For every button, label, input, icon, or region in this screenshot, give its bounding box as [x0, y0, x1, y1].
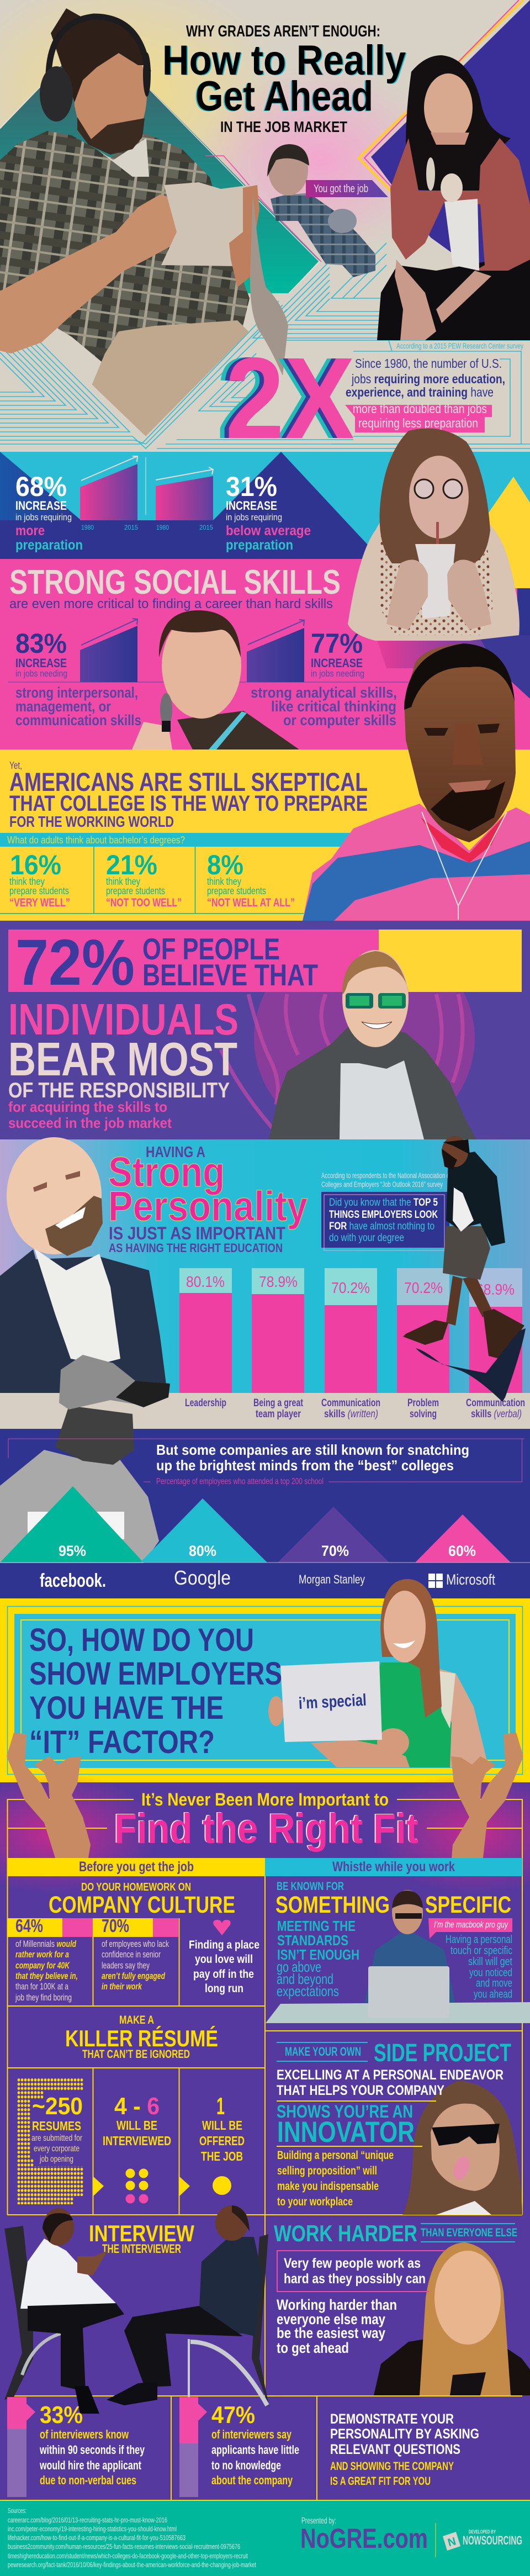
- stat: 77 percent: or computer skills: [283, 712, 396, 729]
- panel: work harder: WORK HARDER: [274, 2220, 417, 2246]
- row: bar labels: Problem: [407, 1397, 439, 1409]
- stat: 64 percent: [7, 1915, 93, 2003]
- text: finding a place: [189, 1939, 259, 1995]
- title: [162, 23, 406, 135]
- panel: be known for something specific: touch or specific: [451, 1945, 512, 1957]
- stat: 31 percent: in jobs requiring: [226, 512, 282, 522]
- stat: 250 resumes: job opening: [39, 2155, 73, 2164]
- stat: 1 offered the job: 1: [216, 2093, 225, 2120]
- row: bar labels: Leadership: [185, 1397, 226, 1409]
- stat: 47 percent: of interviewers say: [211, 2427, 292, 2441]
- bar chart: 83 percent: [80, 619, 137, 682]
- bar chart: employer attributes: 68.9%: [476, 1281, 515, 1298]
- stat: 33 percent: would hire the applicant: [39, 2458, 141, 2472]
- logo: nogre.com: NoGRE.com: [300, 2523, 428, 2554]
- text block: americans are still skeptical: THAT COLLEGE IS THE WAY TO PREPARE: [9, 791, 368, 816]
- heading: strong personality: AS HAVING THE RIGHT EDUCATION: [109, 1241, 283, 1255]
- stat: 4 to 6 interviewed: WILL BE: [116, 2118, 157, 2132]
- logo: nogre.com: [300, 2516, 428, 2554]
- sources: Sources:: [8, 2506, 26, 2515]
- section: hero paper background: [0, 0, 530, 452]
- stat: not too well: [106, 849, 182, 909]
- text block: 1980 jobs stat: Since 1980, the number of U.S.: [355, 356, 502, 371]
- logo: nowsourcing: N: [447, 2535, 457, 2549]
- stat: 77 percent: INCREASE: [311, 656, 363, 670]
- panel: side project: selling proposition” will: [277, 2165, 377, 2177]
- stat: 83 percent: 83%: [15, 628, 67, 659]
- stat: 68 percent: more: [15, 523, 45, 539]
- text block: 1980 jobs stat: experience, and training have: [346, 385, 494, 399]
- heading: SHOW EMPLOYERS: [29, 1656, 282, 1692]
- heading: STRONG SOCIAL SKILLS: [9, 563, 341, 601]
- section: strong social skills: [0, 477, 530, 749]
- stat: 77 percent: 77%: [311, 628, 363, 659]
- panel: interview the interviewer: [4, 2205, 269, 2414]
- stat: 77 percent: strong analytical skills,: [251, 684, 397, 701]
- text block: demonstrate your personality: RELEVANT QUESTIONS: [330, 2442, 460, 2457]
- photo: two men in interview chairs: [4, 2205, 269, 2414]
- text block: individuals bear most: [8, 995, 239, 1131]
- heading: strong personality: Strong: [108, 1149, 225, 1196]
- stat: 64 percent: that they believe in,: [15, 1971, 78, 1981]
- photo: man with headphones reading a letter: [0, 8, 288, 436]
- stat: 47 percent: [179, 2397, 299, 2497]
- panel: be known for something specific: you ahead: [474, 1988, 512, 2000]
- stat: 77 percent: in jobs needing: [311, 668, 364, 679]
- panel: work harder: to get ahead: [277, 2340, 349, 2356]
- panel: be known for something specific: and beyond: [277, 1971, 333, 1987]
- heading: “IT” FACTOR?: [29, 1724, 215, 1760]
- sources: [8, 2506, 256, 2569]
- heading: are even more critical to finding a career than hard skills: [9, 597, 333, 611]
- panel: be known for something specific: STANDARDS: [277, 1932, 348, 1949]
- text block: individuals bear most: OF THE RESPONSIBILITY: [8, 1079, 230, 1102]
- stat: 70 percent: [93, 1915, 179, 1992]
- panel: be known for something specific: expectations: [277, 1983, 339, 1999]
- stat: 1 offered the job: [199, 2093, 245, 2195]
- heading: find the right fit: [114, 1790, 418, 1852]
- stat: very well: prepare students: [9, 885, 69, 896]
- panel: company culture: [7, 1881, 259, 2003]
- decoration: navy triangle top right: [359, 0, 530, 309]
- photo: man with eyebrow raised in striped shirt: [303, 643, 530, 921]
- stat: very well: 16%: [10, 849, 61, 880]
- source note: Colleges and Employers “Job Outlook 2016” survey: [321, 1180, 443, 1189]
- panel: be known for something specific: go above: [277, 1959, 321, 1975]
- stat: 68 percent: 68%: [15, 471, 67, 502]
- stat: not well at all: “NOT WELL AT ALL”: [207, 896, 295, 909]
- row: bar labels: [0, 1393, 530, 1429]
- bar chart: 31 percent: 1980: [156, 524, 169, 531]
- bar chart: employer attributes: 70.2%: [331, 1279, 370, 1296]
- stat: very well: think they: [9, 876, 45, 887]
- stat: not well at all: think they: [207, 876, 241, 887]
- stat: 70 percent: aren’t fully engaged: [102, 1971, 165, 1981]
- section: strong personality background: [0, 1139, 530, 1393]
- heading: strong personality: HAVING A: [146, 1143, 205, 1160]
- source note: According to respondents to the National Association of: [321, 1171, 451, 1180]
- photo: woman with glasses drinking shake: [348, 429, 520, 641]
- stat: 83 percent: strong interpersonal,: [15, 684, 138, 701]
- sources: business2community.com/human-resources/25-fun-facts-resumes-interviews-social-recruitment-0975676: [8, 2542, 240, 2551]
- text block: demonstrate your personality: PERSONALITY BY ASKING: [330, 2426, 479, 2442]
- chart: triangles by company: 95%: [59, 1543, 86, 1559]
- stat: 250 resumes: are submitted for: [31, 2134, 83, 2143]
- section: it factor panel: [0, 1598, 530, 1782]
- heading: strong personality: Personality: [108, 1183, 308, 1230]
- heading: [29, 1622, 282, 1760]
- photo: seated woman in red blazer: [377, 55, 530, 340]
- decoration: yellow frame lines: [7, 1799, 522, 2500]
- heading: SO, HOW DO YOU: [29, 1622, 254, 1658]
- sign: i'm special: [280, 1661, 382, 1742]
- stat: 70 percent: 70%: [102, 1915, 129, 1936]
- photo: smiling woman holding sign: [268, 1579, 489, 1767]
- panel: work harder: everyone else may: [277, 2311, 385, 2327]
- bar chart: 68 percent: 2015: [124, 524, 138, 531]
- text block: best colleges: [8, 1439, 524, 1486]
- row: bar labels: skills (written): [324, 1408, 378, 1420]
- text block: 1980 jobs stat: more than doubled than jobs: [353, 402, 487, 416]
- text block: americans are still skeptical: AMERICANS ARE STILL SKEPTICAL: [9, 767, 368, 796]
- text block: best colleges: Percentage of employees who attended a top 200 school: [156, 1477, 324, 1486]
- stat: 250 resumes: [31, 2093, 83, 2164]
- photo: walking man with check mark: [403, 1136, 526, 1402]
- chart: triangles by company: 80%: [189, 1543, 216, 1559]
- stat: 47 percent: 47%: [211, 2401, 255, 2429]
- callout: top 5 things: do with your degree: [329, 1232, 404, 1244]
- stat: 47 percent: to no knowledge: [211, 2458, 281, 2472]
- panel: side project: SHOWS YOU’RE AN: [277, 2102, 413, 2121]
- heading: find the right fit: Find the Right Fit: [114, 1806, 418, 1852]
- decoration: cyan line pattern: [0, 243, 530, 448]
- panel: killer resume: THAT CAN’T BE IGNORED: [82, 2048, 190, 2061]
- sources: inc.com/peter-economy/19-interesting-hiring-statistics-you-should-know.html: [8, 2525, 177, 2533]
- row: bar labels: team player: [256, 1408, 301, 1420]
- stat: 77 percent: like critical thinking: [271, 698, 396, 715]
- banner: 72 percent: [8, 926, 522, 999]
- text block: americans are still skeptical: FOR THE WORKING WORLD: [9, 813, 174, 830]
- bar chart: 31 percent: 2015: [199, 524, 213, 531]
- stat: 31 percent: [226, 471, 311, 553]
- stat: 64 percent: company for 40K: [15, 1960, 70, 1971]
- stat: 4 to 6 interviewed: INTERVIEWED: [103, 2134, 171, 2148]
- stats: opinions of degrees: [0, 847, 304, 914]
- panel: killer resume: [17, 2014, 245, 2204]
- text block: demonstrate your personality: DEMONSTRATE YOUR: [330, 2411, 454, 2427]
- panel: side project: THAT HELPS YOUR COMPANY: [277, 2083, 444, 2098]
- chart: triangles by company: [0, 1486, 530, 1563]
- panel: killer resume: KILLER RÉSUMÉ: [65, 2025, 218, 2051]
- callout: macbook pro guy: [428, 1918, 512, 1939]
- sources: lifehacker.com/how-to-find-out-if-a-company-is-a-cultural-fit-for-you-510587663: [8, 2533, 186, 2542]
- title: How to Really: [162, 37, 406, 84]
- stat: 31 percent: below average: [226, 523, 311, 539]
- panel: work harder: [274, 2220, 530, 2395]
- title: WHY GRADES AREN’T ENOUGH:: [186, 23, 380, 40]
- band: whistle while you work: [265, 1858, 522, 1876]
- stat: 64 percent: 64%: [15, 1915, 43, 1936]
- stat: 83 percent: communication skills: [15, 712, 141, 729]
- chart: dot grid of resumes: [17, 2078, 83, 2204]
- logo: nogre.com: Presented by:: [301, 2516, 336, 2526]
- logo: nowsourcing: [443, 2529, 522, 2551]
- stat: 70 percent: in their work: [102, 1981, 142, 1992]
- stat: 1 offered the job: WILL BE: [202, 2118, 242, 2132]
- stat: not well at all: prepare students: [207, 885, 266, 896]
- stat: 70 percent: of employees who lack: [102, 1939, 169, 1949]
- text block: demonstrate your personality: AND SHOWING THE COMPANY: [330, 2460, 454, 2473]
- banner: 72 percent: BELIEVE THAT: [142, 958, 318, 992]
- decoration: teal diamond: [0, 32, 321, 293]
- stat: 33 percent: [7, 2397, 145, 2497]
- stat: 31 percent: INCREASE: [226, 499, 277, 513]
- logos: employers: Morgan Stanley: [299, 1572, 365, 1586]
- text block: demonstrate your personality: IS A GREAT FIT FOR YOU: [330, 2475, 431, 2488]
- stat: very well: “VERY WELL”: [9, 896, 70, 909]
- section: best colleges background: [0, 1429, 530, 1598]
- big 2X: 2X: [225, 333, 355, 464]
- photo: laughing bald man in suit: [0, 1137, 167, 1393]
- bar chart: 31 percent: [156, 467, 213, 531]
- stat: 31 percent: preparation: [226, 537, 293, 553]
- panel: be known for something specific: you noticed: [469, 1967, 512, 1979]
- text: finding a place: long run: [205, 1982, 243, 1995]
- stat: 31 percent: 31%: [226, 471, 277, 502]
- sign: i'm special: i’m special: [298, 1691, 367, 1713]
- section: personal responsibility: [0, 921, 530, 1143]
- stat: 250 resumes: every corporate: [34, 2144, 80, 2153]
- text block: individuals bear most: for acquiring the skills to: [8, 1099, 167, 1115]
- text block: best colleges: But some companies are still known for snatching: [156, 1442, 469, 1458]
- photo: man in sunglasses: [269, 950, 476, 1139]
- stat: 83 percent: in jobs needing: [15, 668, 67, 679]
- panel: be known for something specific: and move: [476, 1977, 512, 1989]
- bar chart: employer attributes: 80.1%: [186, 1273, 225, 1290]
- panel: side project: MAKE YOUR OWN: [285, 2045, 361, 2058]
- heading: [9, 563, 341, 611]
- stat: very well: [9, 849, 70, 909]
- bar chart: 77 percent: [247, 620, 304, 682]
- band: whistle while you work: Whistle while you work: [332, 1859, 455, 1875]
- stat: 47 percent: about the company: [211, 2473, 293, 2487]
- source note: [321, 1171, 451, 1189]
- stat: 33 percent: due to non-verbal cues: [40, 2473, 136, 2487]
- stat: 4 to 6 interviewed: 4 - 6: [114, 2093, 160, 2120]
- logos: employers: Google: [174, 1566, 231, 1589]
- stat: 68 percent: in jobs requiring: [15, 512, 72, 522]
- stat: not well at all: 8%: [207, 849, 243, 880]
- text: finding a place: pay off in the: [193, 1968, 254, 1981]
- logo: nowsourcing: DEVELOPED BY: [469, 2529, 496, 2535]
- bar chart: employer attributes: 78.9%: [259, 1273, 298, 1290]
- text block: 1980 jobs stat: jobs requiring more education,: [351, 372, 505, 386]
- stat: 77 percent: [251, 628, 397, 729]
- stat: 250 resumes: ~250: [32, 2093, 83, 2120]
- text block: 1980 jobs stat: [338, 356, 505, 432]
- row: bar labels: Being a great: [253, 1397, 303, 1409]
- panel: work harder: Working harder than: [277, 2297, 397, 2313]
- callout: top 5 things: THINGS EMPLOYERS LOOK: [329, 1209, 438, 1221]
- row: bar labels: skills (verbal): [471, 1408, 522, 1420]
- text block: individuals bear most: INDIVIDUALS: [8, 995, 239, 1044]
- panel: be known for something specific: ISN’T ENOUGH: [277, 1946, 359, 1963]
- logos: employers: [40, 1566, 495, 1591]
- stat: not well at all: [207, 849, 295, 909]
- panel: be known for something specific: SOMETHING: [275, 1892, 390, 1918]
- stat: 47 percent: applicants have little: [211, 2443, 299, 2457]
- text block: demonstrate your personality: [330, 2411, 479, 2488]
- panel: side project: INNOVATOR: [277, 2116, 415, 2149]
- panel: killer resume: MAKE A: [119, 2014, 154, 2026]
- panel: company culture: COMPANY CULTURE: [49, 1892, 235, 1918]
- stat: 64 percent: rather work for a: [15, 1949, 69, 1960]
- stat: 33 percent: 33%: [40, 2401, 83, 2429]
- stat: 250 resumes: RESUMES: [32, 2119, 81, 2133]
- panel: side project: to your workplace: [277, 2195, 353, 2208]
- stat: 68 percent: preparation: [15, 537, 83, 553]
- panel: work harder: be the easiest way: [277, 2325, 385, 2341]
- panel: interview the interviewer: THE INTERVIEWER: [102, 2242, 181, 2256]
- logos: employers: Microsoft: [446, 1571, 495, 1588]
- heading: strong personality: IS JUST AS IMPORTANT: [109, 1223, 285, 1243]
- stat: 4 to 6 interviewed: [103, 2093, 171, 2204]
- sources: careerarc.com/blog/2016/01/13-recruiting-stats-hr-pro-must-know-2016: [8, 2516, 167, 2524]
- title: IN THE JOB MARKET: [220, 118, 347, 135]
- panel: work harder: Very few people work as: [284, 2256, 421, 2271]
- stat: 64 percent: job they find boring: [15, 1992, 72, 2003]
- callout: you got the job: You got the job: [314, 183, 368, 195]
- section: skeptical americans background: [0, 749, 530, 921]
- bar chart: employer attributes: [179, 1268, 522, 1393]
- stat: 33 percent: of interviewers know: [40, 2427, 129, 2441]
- title: Get Ahead: [195, 73, 373, 120]
- stat: 33 percent: within 90 seconds if they: [39, 2443, 145, 2457]
- stat: not too well: 21%: [106, 849, 157, 880]
- stat: not too well: “NOT TOO WELL”: [106, 896, 182, 909]
- banner: 72 percent: 72%: [15, 926, 135, 999]
- text block: americans are still skeptical: Yet,: [9, 760, 22, 771]
- photo: man with microphone: [132, 610, 299, 749]
- stat: 64 percent: of Millennials would: [15, 1939, 76, 1949]
- bar chart: 68 percent: [80, 456, 138, 531]
- panel: company culture: DO YOUR HOMEWORK ON: [81, 1881, 191, 1893]
- logos: employers: facebook.: [40, 1570, 106, 1591]
- band: before you get the job: Before you get the job: [79, 1859, 194, 1875]
- stat: 64 percent: than for 100K at a: [15, 1981, 68, 1992]
- stat: 83 percent: management, or: [15, 698, 111, 715]
- panel: work harder: hard as they possibly can: [284, 2271, 426, 2287]
- arrow: step one: [93, 2176, 104, 2197]
- panel: interview the interviewer: INTERVIEW: [89, 2220, 194, 2246]
- stat: 1 offered the job: OFFERED: [199, 2134, 245, 2148]
- band: before you get the job: [7, 1858, 265, 1876]
- callout: you got the job: [306, 180, 388, 197]
- chart: triangles by company: 70%: [321, 1543, 349, 1559]
- sources: timeshighereducation.com/student/news/which-colleges-do-facebook-google-and-other-top-employers-recruit: [8, 2552, 248, 2560]
- heading: YOU HAVE THE: [29, 1690, 224, 1726]
- arrow: step two: [179, 2176, 190, 2197]
- banner: 72 percent: OF PEOPLE: [142, 932, 280, 966]
- stat: not too well: think they: [106, 876, 140, 887]
- stat: 1 offered the job: THE JOB: [201, 2149, 243, 2163]
- chart: triangles by company: 60%: [448, 1543, 476, 1559]
- bar chart: employer attributes: 70.2%: [404, 1279, 443, 1296]
- text block: americans are still skeptical: [9, 760, 368, 830]
- row: bar labels: solving: [410, 1408, 437, 1420]
- bar chart: 68 percent: 1980: [81, 524, 94, 531]
- photo: man at laptop: [365, 1890, 455, 2018]
- callout: top 5 things: [321, 1192, 449, 1250]
- text: finding a place: Finding a place: [189, 1939, 259, 1951]
- footer: [0, 2500, 530, 2576]
- stat: 70 percent: confidence in senior: [102, 1949, 161, 1960]
- panel: side project: Building a personal “unique: [277, 2149, 394, 2162]
- decoration: wave lines: [221, 994, 463, 1132]
- band: bachelor's degree question: [0, 833, 364, 847]
- panel: side project: make you indispensable: [277, 2180, 379, 2193]
- callout: top 5 things: Did you know that the TOP 5: [329, 1197, 438, 1208]
- row: bar labels: Communication: [321, 1397, 380, 1409]
- section: find the right fit background: [0, 1773, 530, 2500]
- text block: individuals bear most: succeed in the job market: [8, 1115, 172, 1131]
- text block: 1980 jobs stat: requiring less preparation: [358, 416, 478, 430]
- text block: individuals bear most: BEAR MOST: [8, 1033, 237, 1086]
- photo: blonde woman: [374, 2242, 530, 2395]
- photo: long-haired man sticking tongue out: [402, 2081, 522, 2215]
- stat: not too well: prepare students: [106, 885, 165, 896]
- icon: heart: [213, 1920, 231, 1935]
- text block: best colleges: up the brightest minds from the “best” colleges: [156, 1457, 454, 1474]
- photo: man in baseball cap (grayscale): [0, 1355, 170, 1563]
- panel: be known for something specific: BE KNOWN FOR: [277, 1880, 344, 1893]
- photo: small man gesturing: [267, 144, 375, 277]
- stat: 68 percent: [15, 471, 83, 553]
- sources: pewresearch.org/fact-tank/2016/10/06/key-findings-about-the-american-workforce-and-the-changing-job-market: [8, 2561, 256, 2569]
- heading: strong personality: [108, 1143, 308, 1255]
- band: bachelor's degree question: What do adults think about bachelor’s degrees?: [7, 835, 185, 846]
- stat: 83 percent: INCREASE: [15, 656, 67, 670]
- section: preparation stats: [0, 452, 530, 559]
- panel: be known for something specific: [266, 1880, 530, 2023]
- heading: find the right fit: It’s Never Been More Important to: [141, 1790, 389, 1809]
- panel: be known for something specific: skill will get: [468, 1956, 512, 1968]
- icon: left hand: [7, 1733, 91, 1858]
- stat: 83 percent: [15, 628, 141, 729]
- icon: right hand: [451, 1733, 523, 1858]
- panel: side project: [277, 2039, 522, 2215]
- stat: 70 percent: leaders say they: [102, 1960, 150, 1971]
- stat: 68 percent: INCREASE: [15, 499, 67, 513]
- panel: be known for something specific: MEETING THE: [277, 1918, 356, 1934]
- text: finding a place: you love will: [195, 1953, 253, 1966]
- callout: top 5 things: FOR have almost nothing to: [329, 1221, 434, 1232]
